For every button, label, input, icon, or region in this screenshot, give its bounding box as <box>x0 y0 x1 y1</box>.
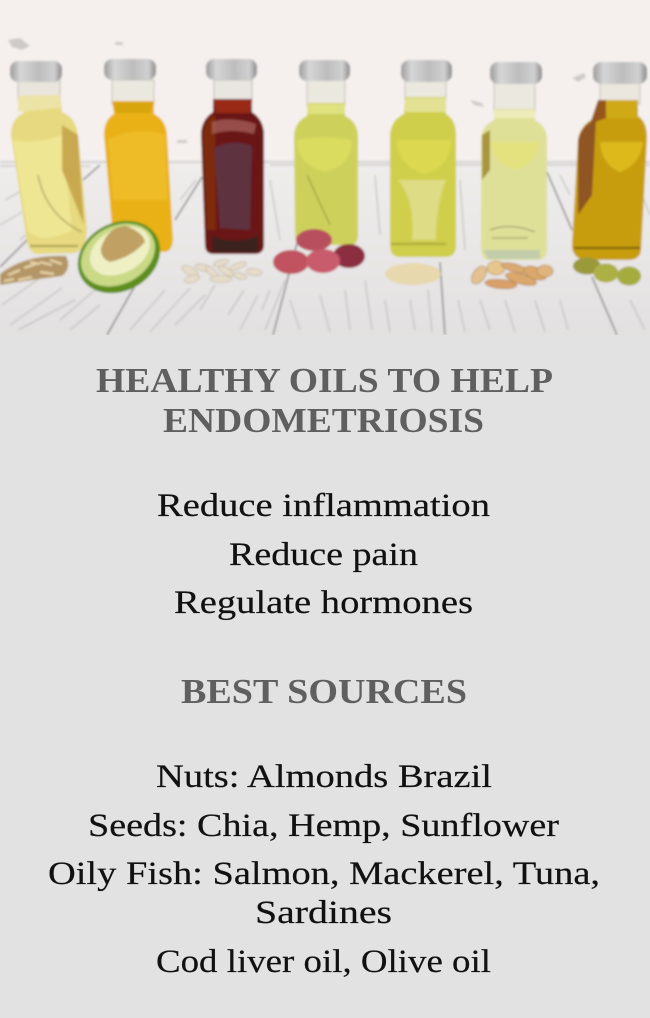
sesame seeds <box>385 263 441 285</box>
text block: sources list <box>48 759 600 980</box>
bottle 2 <box>104 59 173 252</box>
text block: sources list: Nuts: Almonds Brazil <box>156 759 492 795</box>
text block: benefits: Reduce inflammation <box>157 488 490 524</box>
flax seeds <box>0 256 68 285</box>
text block: benefits: Reduce pain <box>229 537 418 573</box>
olives <box>573 258 641 286</box>
text block: sources list: Seeds: Chia, Hemp, Sunflower <box>88 808 559 844</box>
bottle 6 <box>481 62 547 260</box>
text block: sources list: Sardines <box>255 895 392 931</box>
panel: text background <box>0 335 650 1018</box>
text block: sources list: Oily Fish: Salmon, Mackerel, Tuna, <box>48 856 600 892</box>
wooden table <box>0 160 650 340</box>
pumpkin seeds <box>180 258 262 284</box>
text block: benefits <box>157 488 490 621</box>
text block: benefits: Regulate hormones <box>174 585 473 621</box>
avocado half <box>65 207 173 307</box>
title <box>96 361 553 440</box>
avocado pit <box>101 226 145 262</box>
bottle 4 <box>294 60 358 245</box>
heading: best sources: BEST SOURCES <box>181 672 467 711</box>
text block: sources list: Cod liver oil, Olive oil <box>156 944 491 980</box>
wall scuffs <box>8 38 586 143</box>
grapes <box>273 229 365 274</box>
title: ENDOMETRIOSIS <box>163 401 484 440</box>
wall background <box>0 0 650 162</box>
bottle 1 <box>10 61 87 254</box>
panel: photo of oil bottles <box>0 0 650 340</box>
bottle 3 <box>201 59 264 254</box>
title: HEALTHY OILS TO HELP <box>96 361 553 400</box>
bottle 7 <box>572 62 647 260</box>
almonds <box>468 261 553 290</box>
bottle 5 <box>390 60 456 257</box>
